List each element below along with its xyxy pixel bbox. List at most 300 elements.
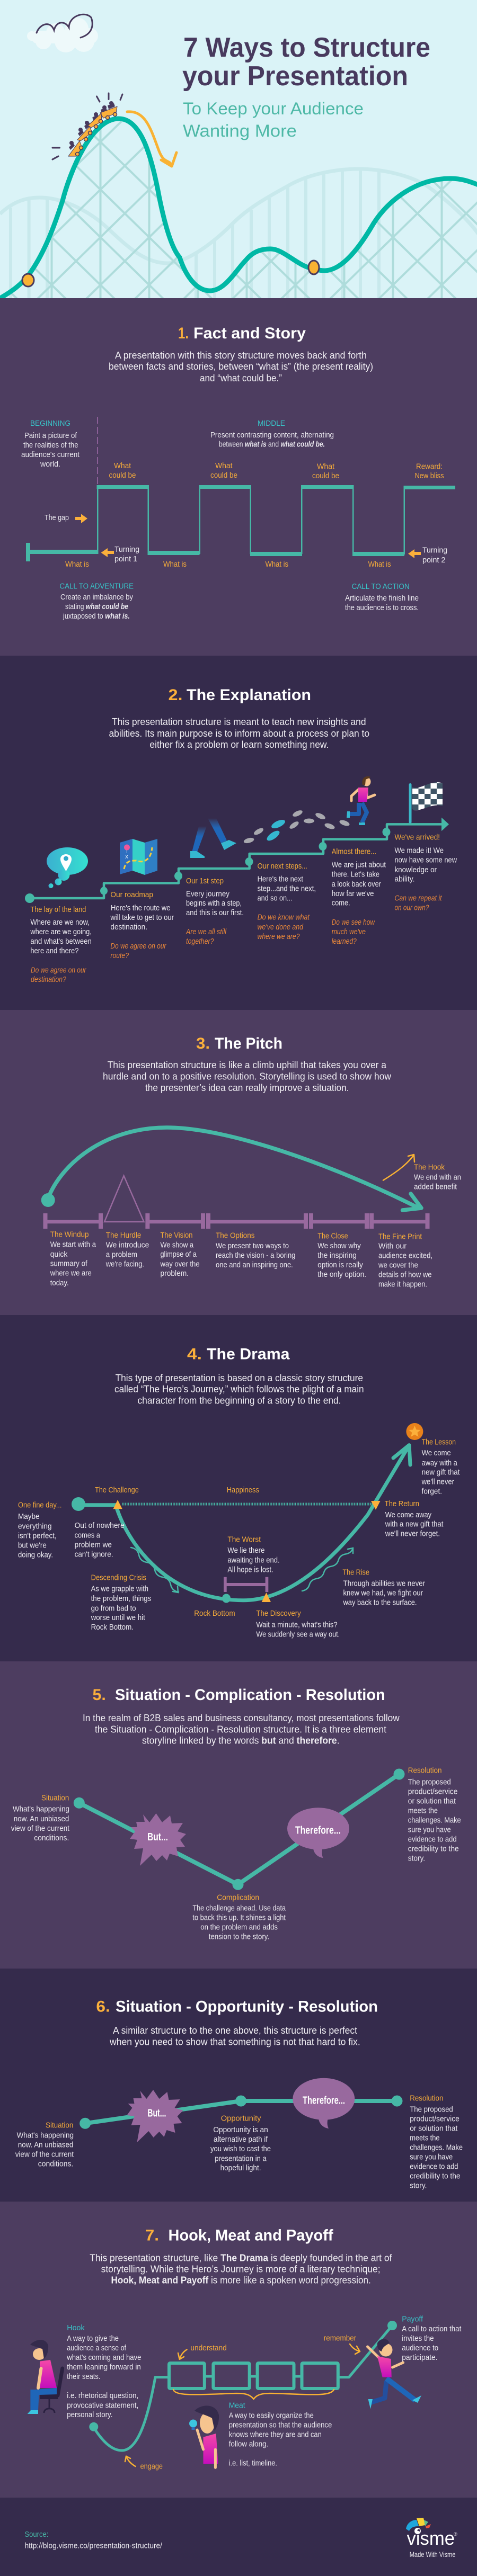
panel: 6 Situation Opportunity Resolution bbox=[0, 1969, 477, 2202]
intro text: between facts and stories, between “what is” (the present reality) bbox=[109, 361, 373, 372]
panel: 4 The Drama bbox=[0, 1315, 477, 1661]
text: one fine day: doing okay. bbox=[18, 1551, 53, 1560]
chart: rising line bbox=[80, 2095, 402, 2129]
step 4: our next steps: and so on... bbox=[258, 895, 293, 903]
text: the hurdle: The Hurdle bbox=[106, 1231, 141, 1240]
labels: what could be: What bbox=[215, 462, 232, 470]
text: happiness: Happiness bbox=[227, 1486, 259, 1495]
callout: the hook: The Hook bbox=[414, 1164, 445, 1172]
text: the hurdle: we're facing. bbox=[105, 1260, 144, 1268]
text: complication: tension to the story. bbox=[209, 1933, 269, 1942]
step 2: our roadmap: Do we agree on our bbox=[110, 942, 166, 951]
callout: therefore bubble: Therefore... bbox=[295, 1825, 341, 1837]
step 1: lay of the land: The lay of the land bbox=[30, 906, 86, 914]
text: the windup: where we are bbox=[50, 1269, 92, 1278]
text: the return bbox=[385, 1500, 443, 1539]
panel: footer bbox=[0, 2498, 477, 2576]
logo: visme: visme bbox=[407, 2527, 455, 2549]
text: the worst: The Worst bbox=[227, 1536, 261, 1544]
text: rock bottom: Rock Bottom bbox=[194, 1609, 235, 1618]
intro text: This presentation structure is like a climb uphill that takes you over a bbox=[108, 1060, 387, 1070]
text: the lesson: The Lesson bbox=[422, 1438, 456, 1447]
text: call to action: the audience is to cross. bbox=[345, 604, 419, 612]
step 6: we've arrived: now have some new bbox=[394, 856, 457, 865]
text: the close bbox=[317, 1232, 366, 1279]
text: the discovery: The Discovery bbox=[256, 1609, 301, 1618]
text: challenge body: Out of nowhere bbox=[75, 1522, 125, 1530]
heading: 3. bbox=[196, 1035, 210, 1052]
step 6: we've arrived: We made it! We bbox=[394, 846, 444, 855]
hurdle triangle bbox=[104, 1176, 144, 1222]
intro text: and “what could be.” bbox=[200, 373, 282, 383]
text: the rise: way back to the surface. bbox=[343, 1598, 417, 1607]
step 4: our next steps: Here's the next bbox=[258, 875, 303, 884]
curly brace bbox=[173, 2390, 334, 2399]
text: resolution: Resolution bbox=[408, 1766, 442, 1775]
step 3: our 1st step: Our 1st step bbox=[186, 877, 224, 885]
callout: but burst bbox=[127, 2090, 183, 2142]
text: the discovery bbox=[256, 1609, 340, 1639]
heading: 7. bbox=[145, 2226, 159, 2244]
text: middle: between what is and what could be. bbox=[219, 441, 325, 449]
text: resolution: product/service bbox=[410, 2115, 460, 2124]
icon: thinking person bbox=[189, 2405, 219, 2467]
text: resolution: story. bbox=[408, 1854, 425, 1863]
callout: turning point 2: point 2 bbox=[422, 556, 445, 565]
step 1: lay of the land: and what's between bbox=[30, 937, 92, 946]
text: the return: The Return bbox=[385, 1500, 419, 1508]
text: meat: A way to easily organize the bbox=[229, 2412, 314, 2420]
step 6: we've arrived bbox=[394, 834, 457, 913]
text: the worst: All hope is lost. bbox=[227, 1566, 273, 1574]
intro text bbox=[109, 350, 373, 383]
step 6: we've arrived: ability. bbox=[394, 875, 414, 884]
text: beginning: audience's current bbox=[21, 451, 80, 459]
heading: Fact and Story bbox=[193, 325, 306, 342]
text: resolution: credibility to the bbox=[408, 1845, 459, 1853]
heading: 6. bbox=[96, 1998, 110, 2015]
text: call to adventure: Create an imbalance by bbox=[60, 593, 134, 602]
text: resolution: challenges. Make bbox=[410, 2144, 463, 2152]
text: the vision bbox=[160, 1231, 200, 1278]
text: one fine day: everything bbox=[18, 1523, 52, 1531]
text: hook: i.e. rhetorical question, bbox=[67, 2392, 138, 2400]
text: resolution: credibility to the bbox=[410, 2172, 460, 2181]
text: resolution: or solution that bbox=[410, 2124, 457, 2133]
text: situation: view of the current bbox=[11, 1824, 69, 1833]
label: engage with arrow: engage bbox=[140, 2463, 163, 2471]
intro text: called “The Hero’s Journey,” which follows the plight of a main bbox=[114, 1384, 364, 1394]
text: call to adventure: stating what could be bbox=[65, 603, 128, 611]
intro text: This presentation structure is meant to teach new insights and bbox=[112, 717, 366, 727]
source: http://blog.visme.co/presentation-structure/ bbox=[24, 2542, 163, 2551]
callout: the gap: The gap bbox=[45, 514, 69, 522]
text: the fine print: audience excited, bbox=[378, 1251, 432, 1260]
text: meat: presentation so that the audience bbox=[229, 2421, 332, 2430]
callout: turning point 2 bbox=[408, 547, 447, 565]
intro text: hurdle and on to a positive resolution. Storytelling is used to show how bbox=[103, 1071, 392, 1082]
panel: 3 The Pitch bbox=[0, 1010, 477, 1315]
text: the lesson: We come bbox=[422, 1449, 451, 1457]
text: the close: We show why bbox=[317, 1242, 361, 1250]
text: call to adventure bbox=[59, 582, 134, 621]
labels: what could be: could be bbox=[109, 471, 136, 480]
title: your Presentation bbox=[182, 61, 408, 92]
heading: 5. bbox=[92, 1686, 106, 1704]
label: understand with arrow bbox=[178, 2344, 227, 2359]
text: the options: We present two ways to bbox=[216, 1242, 289, 1250]
source: Source: bbox=[24, 2530, 48, 2539]
text: resolution: sure you have bbox=[408, 1826, 451, 1834]
text: the discovery: Wait a minute, what's this? bbox=[256, 1621, 338, 1629]
text: situation bbox=[15, 2121, 74, 2168]
text: resolution: The proposed bbox=[410, 2105, 453, 2114]
text: situation: What's happening bbox=[17, 2131, 74, 2140]
text: the windup: The Windup bbox=[50, 1231, 89, 1239]
step 4: our next steps: Do we know what bbox=[258, 913, 310, 922]
callout: turning point 1: point 1 bbox=[114, 555, 137, 564]
text: the vision: problem. bbox=[160, 1269, 189, 1278]
text: one fine day bbox=[18, 1501, 61, 1560]
step 1: lay of the land: Do we agree on our bbox=[31, 966, 86, 974]
text: the vision: We show a bbox=[160, 1241, 194, 1249]
panel: 7 Hook Meat and Payoff bbox=[0, 2202, 477, 2498]
text: resolution: story. bbox=[410, 2182, 427, 2190]
text: resolution: challenges. Make bbox=[408, 1816, 461, 1824]
text: the fine print bbox=[378, 1232, 432, 1289]
text: descending crisis: worse until we hit bbox=[91, 1614, 145, 1622]
step 1: lay of the land: destination? bbox=[31, 976, 67, 984]
text: hook: them leaning forward in bbox=[67, 2363, 141, 2372]
text: descending crisis bbox=[91, 1573, 151, 1632]
text: the vision: way over the bbox=[160, 1260, 200, 1268]
text: resolution: sure you have bbox=[410, 2153, 453, 2162]
step 1: lay of the land: where are we going, bbox=[30, 928, 92, 936]
intro text: Hook, Meat and Payoff is more like a spoken word progression. bbox=[111, 2275, 371, 2286]
text: the discovery: We suddenly see a way out. bbox=[256, 1631, 340, 1639]
text: resolution: Resolution bbox=[410, 2095, 443, 2103]
arrow: descending wave bbox=[131, 1548, 179, 1593]
text: resolution bbox=[408, 1766, 461, 1863]
callout: turning point 1: Turning bbox=[114, 545, 139, 554]
labels: what could be: could be bbox=[210, 471, 237, 480]
text: opportunity: hopeful light. bbox=[220, 2164, 261, 2172]
text: the windup: We start with a bbox=[50, 1241, 96, 1249]
text: hook: provocative statement, bbox=[67, 2401, 138, 2410]
text: opportunity: alternative path if bbox=[214, 2135, 268, 2144]
text: the rise bbox=[342, 1568, 425, 1607]
step 2: our roadmap: Our roadmap bbox=[110, 891, 153, 899]
chart: hook meat payoff track bbox=[89, 2321, 397, 2450]
text: the windup: today. bbox=[50, 1279, 69, 1287]
step 5: almost there: Do we see how bbox=[332, 918, 375, 927]
text: situation: conditions. bbox=[34, 1834, 69, 1842]
text: the worst: We lie there bbox=[227, 1546, 264, 1555]
text: descending crisis: As we grapple with bbox=[91, 1585, 148, 1594]
text: the lesson: we'll never bbox=[421, 1478, 454, 1486]
text: opportunity: Opportunity is an bbox=[213, 2126, 268, 2134]
staircase line with stops bbox=[25, 818, 449, 903]
text: descending crisis: Rock Bottom. bbox=[91, 1623, 134, 1632]
icon: cloud bbox=[27, 14, 98, 52]
timeline brackets bbox=[43, 1213, 429, 1229]
step 6: we've arrived: We've arrived! bbox=[394, 834, 440, 842]
step 5: almost there: how far we've bbox=[332, 890, 374, 898]
text: one fine day: but we're bbox=[18, 1542, 47, 1550]
heading: Situation - Opportunity - Resolution bbox=[116, 1998, 378, 2015]
text: payoff bbox=[402, 2314, 461, 2362]
text: resolution: product/service bbox=[408, 1787, 457, 1796]
intro text: character from the beginning of a story to the end. bbox=[138, 1396, 341, 1406]
text: the options: one and an inspiring one. bbox=[216, 1261, 293, 1269]
text: meat: follow along. bbox=[229, 2440, 268, 2449]
text: descending crisis: the problem, things bbox=[91, 1595, 151, 1603]
callout: turning point 2: Turning bbox=[422, 547, 447, 555]
text: meat: Meat bbox=[229, 2401, 245, 2410]
text: hook: Hook bbox=[67, 2323, 85, 2332]
labels: what could be: could be bbox=[312, 472, 339, 480]
arrow: descent bbox=[127, 112, 176, 166]
step 2: our roadmap: Here's the route we bbox=[111, 904, 171, 913]
icon: checkered flag bbox=[409, 782, 443, 824]
motion marks bbox=[52, 93, 122, 159]
icon: seated man bbox=[28, 2340, 63, 2414]
text: the windup bbox=[50, 1231, 96, 1287]
text: the rise: Through abilities we never bbox=[343, 1579, 425, 1588]
step 3: our 1st step: Every journey bbox=[186, 890, 230, 898]
labels: what is bbox=[65, 560, 391, 569]
step 3: our 1st step: and this is our first. bbox=[186, 909, 244, 917]
lattice under main track bbox=[0, 119, 477, 300]
rock bottom bracket bbox=[224, 1577, 268, 1592]
step 3: our 1st step: begins with a step, bbox=[186, 899, 242, 908]
intro text: storyline linked by the words but and therefore. bbox=[142, 1736, 340, 1746]
step 5: almost there: Almost there... bbox=[332, 847, 376, 856]
logo: visme bbox=[406, 2518, 457, 2559]
text: the vision: glimpse of a bbox=[160, 1250, 197, 1259]
intro text: A presentation with this story structure moves back and forth bbox=[115, 350, 367, 361]
text: middle: Present contrasting content, alternating bbox=[210, 431, 334, 440]
icon: reaching person bbox=[368, 2339, 421, 2409]
text: situation: conditions. bbox=[38, 2160, 73, 2168]
step 4: our next steps bbox=[258, 862, 316, 941]
label: understand with arrow: understand bbox=[190, 2344, 227, 2353]
chart: pitch arc arrow bbox=[41, 1128, 421, 1210]
intro text bbox=[109, 717, 369, 750]
logo: visme: Made With Visme bbox=[410, 2550, 456, 2559]
icon: map: X bbox=[125, 854, 128, 860]
text: the fine print: we cover the bbox=[378, 1262, 418, 1270]
label: remember with arrow bbox=[324, 2334, 360, 2354]
text: the lesson bbox=[421, 1438, 460, 1496]
text: meat bbox=[229, 2401, 332, 2468]
heading: The Explanation bbox=[187, 686, 311, 704]
text: situation bbox=[11, 1794, 69, 1842]
text: the hurdle: We introduce bbox=[106, 1241, 149, 1249]
panel: 1 Fact and Story bbox=[0, 298, 477, 656]
heading: 1. bbox=[178, 325, 189, 342]
text: middle: MIDDLE bbox=[258, 419, 285, 428]
callout: but burst: But... bbox=[147, 1831, 168, 1843]
icon: star medal bbox=[406, 1423, 423, 1440]
text: situation: Situation bbox=[46, 2121, 73, 2130]
step 5: almost there: much we've bbox=[332, 928, 366, 936]
text: the close: the inspiring bbox=[317, 1251, 357, 1260]
text: hook: A way to give the bbox=[67, 2334, 119, 2343]
intro text: the Situation - Complication - Resolution structure. It is a three element bbox=[95, 1724, 386, 1734]
text: resolution bbox=[410, 2095, 463, 2190]
labels: what could be: New bliss bbox=[414, 472, 444, 480]
text: situation: What's happening bbox=[13, 1805, 69, 1814]
intro text: This presentation structure, like The Drama is deeply founded in the art of bbox=[90, 2252, 392, 2263]
background roller coaster bbox=[0, 169, 477, 298]
callout: therefore bubble bbox=[293, 2078, 355, 2128]
intro text: abilities. Its main purpose is to inform about a process or plan to bbox=[109, 728, 369, 739]
text: challenge body: can't ignore. bbox=[75, 1550, 113, 1559]
text: the close: The Close bbox=[317, 1232, 348, 1241]
text: resolution: evidence to add bbox=[408, 1835, 457, 1844]
chart: hero's journey curve bbox=[72, 1445, 410, 1600]
text: one fine day: isn't perfect, bbox=[18, 1532, 57, 1541]
title: 7 Ways to Structure bbox=[183, 32, 430, 63]
intro text bbox=[103, 1060, 392, 1093]
text: the worst bbox=[227, 1536, 280, 1574]
subtitle: Wanting More bbox=[183, 121, 297, 140]
text: call to action: CALL TO ACTION bbox=[352, 582, 410, 591]
text: payoff: audience to bbox=[402, 2344, 438, 2353]
label: engage with arrow bbox=[125, 2456, 163, 2471]
text: the options: The Options bbox=[216, 1232, 254, 1240]
text: resolution: evidence to add bbox=[410, 2163, 458, 2171]
callout: therefore bubble: Therefore... bbox=[303, 2095, 345, 2107]
icon: walking legs bbox=[190, 818, 236, 858]
heading: The Pitch bbox=[215, 1035, 282, 1052]
step 5: almost there: We are just about bbox=[332, 861, 386, 870]
text: payoff: Payoff bbox=[402, 2314, 423, 2323]
step 4: our next steps: where we are? bbox=[258, 933, 300, 941]
labels: what is: What is bbox=[265, 560, 288, 569]
text: challenge body bbox=[75, 1522, 125, 1559]
callout: therefore bubble bbox=[287, 1808, 349, 1858]
text: hook: their seats. bbox=[67, 2373, 100, 2381]
text: the windup: summary of bbox=[50, 1260, 88, 1268]
marker: rock bottom dot bbox=[222, 1594, 231, 1603]
text: the options: reach the vision - a boring bbox=[216, 1251, 295, 1260]
step 5: almost there: there. Let's take bbox=[332, 871, 379, 879]
marker: discovery triangle bbox=[262, 1593, 271, 1602]
text: situation: view of the current bbox=[15, 2151, 74, 2159]
text: descending crisis: Descending Crisis bbox=[91, 1573, 146, 1582]
intro text bbox=[90, 2252, 392, 2286]
icon: runner bbox=[347, 776, 375, 825]
text: situation: now. An unbiased bbox=[14, 1815, 69, 1823]
step 2: our roadmap bbox=[110, 891, 174, 960]
intro text: the presenter’s idea can really improve a situation. bbox=[145, 1083, 349, 1093]
text: one fine day: Maybe bbox=[18, 1513, 40, 1521]
labels: what is: What is bbox=[368, 560, 391, 569]
text: opportunity: you wish to cast the bbox=[210, 2145, 271, 2153]
callout: the hook bbox=[383, 1155, 461, 1192]
intro text bbox=[109, 2025, 360, 2047]
step 2: our roadmap: route? bbox=[110, 952, 129, 960]
text: complication: Complication bbox=[217, 1894, 259, 1902]
step 5: almost there bbox=[332, 847, 386, 946]
callout: the hook: We end with an bbox=[414, 1174, 461, 1182]
source bbox=[24, 2530, 163, 2551]
panel: 2 The Explanation bbox=[0, 656, 477, 1010]
text: complication: to back this up. It shines a light bbox=[192, 1914, 286, 1922]
text: resolution: The proposed bbox=[408, 1778, 451, 1786]
labels: what could be: What bbox=[317, 463, 334, 471]
step 4: our next steps: step...and the next, bbox=[258, 884, 316, 893]
intro text bbox=[83, 1713, 400, 1746]
text: beginning: BEGINNING bbox=[30, 419, 70, 428]
text: payoff: participate. bbox=[402, 2354, 438, 2362]
main roller coaster track bbox=[0, 119, 477, 300]
text: middle bbox=[210, 419, 334, 449]
text: beginning: Paint a picture of bbox=[24, 432, 77, 440]
step 5: almost there: come. bbox=[332, 899, 350, 908]
text: the rise: The Rise bbox=[342, 1568, 369, 1577]
labels: what could be: Reward: bbox=[416, 463, 443, 471]
label: remember with arrow: remember bbox=[324, 2334, 356, 2342]
title bbox=[182, 32, 430, 92]
text: meat: knows where they are and can bbox=[229, 2431, 322, 2439]
text: the return: we'll never forget. bbox=[385, 1530, 440, 1539]
text: the windup: quick bbox=[50, 1250, 68, 1259]
arrow: rising wave bbox=[302, 1548, 353, 1591]
logo: visme: ® bbox=[454, 2532, 457, 2537]
step 6: we've arrived: knowledge or bbox=[394, 866, 437, 874]
icon: coaster cars with riders bbox=[68, 101, 117, 156]
labels: what could be: What bbox=[114, 462, 131, 470]
text: meat: i.e. list, timeline. bbox=[229, 2459, 277, 2468]
text: the options bbox=[216, 1232, 295, 1269]
text: call to action: Articulate the finish line bbox=[345, 594, 419, 603]
callout: turning point 1 bbox=[101, 545, 139, 564]
icon: map bbox=[120, 839, 157, 875]
text: complication bbox=[192, 1894, 286, 1942]
intro text: A similar structure to the one above, this structure is perfect bbox=[113, 2025, 357, 2036]
chart: what is / what could be square wave bbox=[26, 485, 455, 561]
step 5: almost there: a look back over bbox=[332, 880, 381, 889]
text: opportunity: presentation in a bbox=[215, 2154, 267, 2163]
text: the lesson: away with a bbox=[422, 1459, 458, 1468]
text: the close: the only option. bbox=[317, 1271, 366, 1279]
text: call to action bbox=[345, 582, 419, 612]
text: the fine print: With our bbox=[378, 1242, 407, 1251]
text: beginning: world. bbox=[40, 460, 60, 469]
step 4: our next steps: Our next steps... bbox=[258, 862, 307, 871]
text: the worst: awaiting the end. bbox=[227, 1556, 280, 1564]
step 3: our 1st step bbox=[186, 877, 244, 946]
text: the vision: The Vision bbox=[160, 1231, 192, 1240]
intro text bbox=[114, 1373, 364, 1406]
step 1: lay of the land: here and there? bbox=[30, 947, 78, 955]
intro text: when you need to show that something is not that hard to fix. bbox=[109, 2036, 360, 2047]
labels: what could be bbox=[109, 462, 444, 480]
text: the lesson: forget. bbox=[422, 1488, 442, 1496]
callout: the gap bbox=[45, 514, 87, 523]
text: resolution: meets the bbox=[408, 1806, 438, 1815]
text: hook: what's coming and have bbox=[66, 2354, 141, 2362]
heading: The Drama bbox=[207, 1345, 290, 1363]
text: call to adventure: CALL TO ADVENTURE bbox=[59, 582, 134, 591]
intro text: either fix a problem or learn something new. bbox=[149, 739, 329, 750]
text: opportunity bbox=[210, 2114, 271, 2172]
text: payoff: A call to action that bbox=[402, 2325, 461, 2333]
text: the return: We come away bbox=[385, 1511, 432, 1519]
